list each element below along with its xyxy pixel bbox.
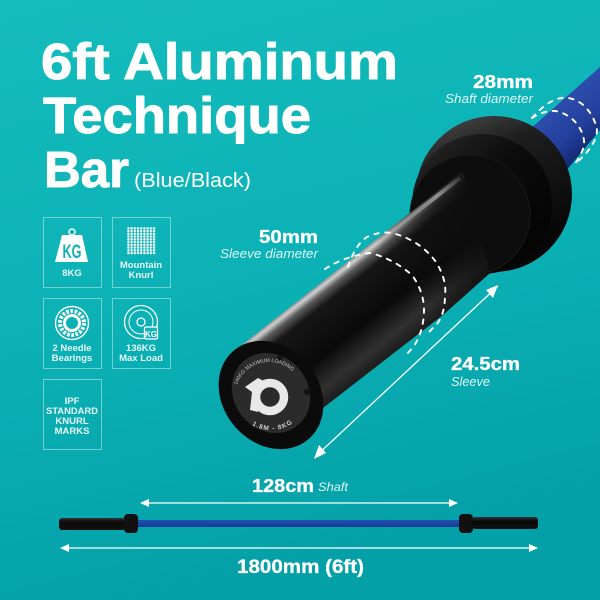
panel: max load: [112, 298, 170, 368]
label: 28mm shaft diameter: Shaft diameter: [445, 91, 534, 106]
panel: mountain knurl: Knurl: [129, 270, 153, 281]
collar: [410, 116, 572, 275]
icon: knurl dots: [127, 227, 156, 254]
blue shaft: [520, 67, 600, 178]
icon: kettle weight: KG: [62, 242, 82, 263]
title: 6ft Aluminum: [41, 33, 398, 90]
label: total length: 1800mm (6ft): [237, 557, 364, 578]
panel: needle bearings: Bearings: [52, 353, 92, 364]
sleeve: [243, 172, 490, 408]
title: (Blue/Black): [134, 170, 251, 192]
title: [41, 33, 398, 198]
label: 24.5cm sleeve: [451, 354, 520, 389]
label: 128cm shaft: Shaft: [318, 482, 349, 494]
label: 24.5cm sleeve: Sleeve: [451, 374, 490, 389]
panel: max load: 136KG: [126, 343, 156, 354]
sleeve diameter dashed rings: [325, 232, 445, 354]
panel: IPF standard knurl marks: IPF: [65, 396, 80, 407]
label: 24.5cm sleeve: 24.5cm: [451, 354, 520, 374]
arrow: total length: [60, 544, 538, 552]
icon: plate with KG tag: KG: [145, 330, 157, 339]
panel: IPF standard knurl marks: MARKS: [55, 426, 89, 437]
panel: mountain knurl: [112, 218, 170, 288]
label: 28mm shaft diameter: [445, 72, 534, 106]
panel: needle bearings: 2 Needle: [52, 343, 92, 354]
arrow: shaft length: [140, 499, 458, 507]
label: 50mm sleeve diameter: 50mm: [259, 227, 318, 247]
full barbell: [59, 514, 538, 533]
panel: IPF standard knurl marks: STANDARD: [46, 406, 98, 417]
panel: IPF standard knurl marks: [44, 380, 102, 450]
label: 128cm shaft: [252, 475, 349, 496]
shaft diameter dashed rings: [532, 98, 597, 164]
panel: needle bearings: [44, 298, 102, 368]
panel: max load: Max Load: [119, 353, 163, 364]
icon: bearing: [56, 306, 88, 340]
label: 28mm shaft diameter: 28mm: [473, 72, 533, 92]
panel: weight 8KG: [44, 218, 102, 288]
sleeve end cap: 1.8M - 8KG: [252, 420, 292, 430]
sleeve length arrow: [314, 285, 498, 459]
label: 50mm sleeve diameter: [220, 227, 319, 261]
logo: [245, 378, 284, 412]
title: Technique: [43, 87, 311, 144]
panel: weight 8KG: 8KG: [62, 268, 82, 279]
sleeve end cap: [218, 340, 324, 450]
sleeve end cap: 140KG MAXIMUM LOADING: [234, 358, 294, 385]
label: 50mm sleeve diameter: Sleeve diameter: [220, 246, 319, 261]
panel: mountain knurl: Mountain: [120, 260, 162, 271]
panel: IPF standard knurl marks: KNURL: [55, 416, 89, 427]
title: Bar: [44, 141, 129, 198]
label: 128cm shaft: 128cm: [252, 475, 314, 496]
